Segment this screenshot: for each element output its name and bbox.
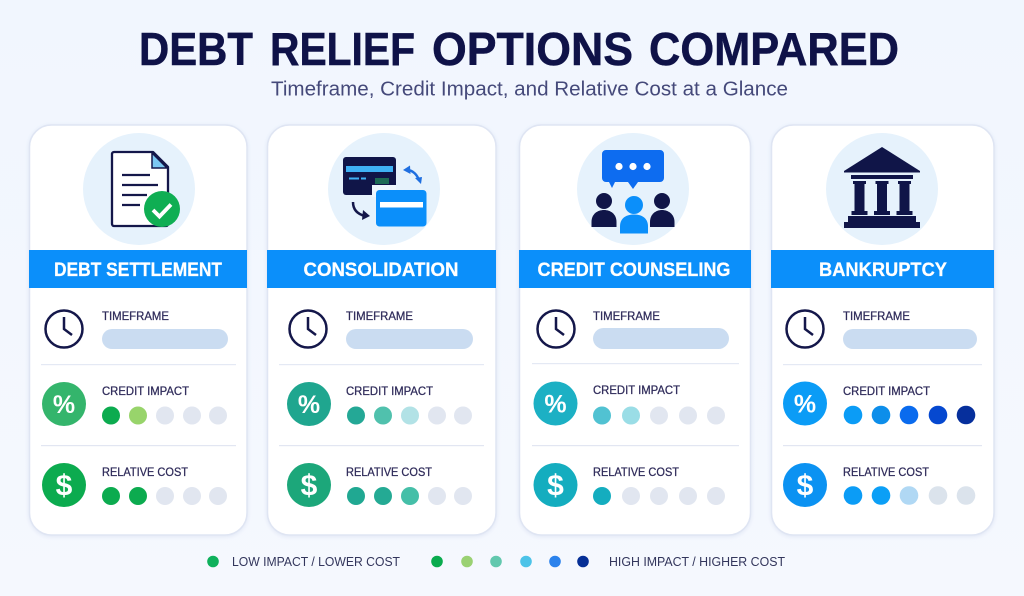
credit impact row: CREDIT IMPACT [843, 386, 930, 398]
heading band [771, 250, 994, 288]
title: COMPARED [649, 23, 899, 75]
credit impact row: % [794, 390, 816, 418]
title: RELIEF [270, 23, 415, 75]
heading band [29, 250, 247, 288]
relative cost row: $ [301, 470, 318, 502]
heading band: CONSOLIDATION [304, 260, 458, 281]
relative cost row: RELATIVE COST [593, 467, 679, 479]
title: DEBT [139, 23, 253, 75]
relative cost row: RELATIVE COST [843, 467, 929, 479]
relative cost row: RELATIVE COST [346, 467, 432, 479]
timeframe row [290, 310, 473, 349]
icon: credit cards with arrows [328, 133, 440, 245]
heading band: DEBT SETTLEMENT [54, 260, 222, 281]
title [139, 23, 899, 75]
legend [207, 555, 785, 569]
credit impact row [287, 382, 472, 426]
relative cost row: $ [797, 470, 814, 502]
legend: LOW IMPACT / LOWER COST [232, 555, 400, 569]
legend: HIGH IMPACT / HIGHER COST [609, 555, 785, 569]
panel: credit counseling [519, 125, 751, 535]
timeframe row: TIMEFRAME [843, 311, 910, 323]
credit impact row [42, 382, 227, 426]
timeframe row: TIMEFRAME [102, 311, 169, 323]
credit impact row: CREDIT IMPACT [593, 385, 680, 397]
timeframe row [538, 310, 729, 349]
credit impact row: % [53, 391, 75, 419]
timeframe row: TIMEFRAME [346, 311, 413, 323]
relative cost row [287, 463, 472, 507]
icon: people with speech bubble [577, 133, 689, 245]
credit impact row: CREDIT IMPACT [102, 386, 189, 398]
panel: bankruptcy [771, 125, 994, 535]
relative cost row: $ [547, 470, 564, 502]
relative cost row [534, 463, 725, 507]
relative cost row: $ [56, 470, 73, 502]
heading band [267, 250, 496, 288]
icon: courthouse [826, 133, 938, 245]
panel: debt settlement [29, 125, 247, 535]
heading band: BANKRUPTCY [819, 260, 947, 281]
credit impact row [783, 382, 975, 426]
credit impact row [534, 382, 725, 426]
timeframe row: TIMEFRAME [593, 311, 660, 323]
credit impact row: % [544, 390, 567, 418]
relative cost row: RELATIVE COST [102, 467, 188, 479]
relative cost row [783, 463, 975, 507]
icon: document with check [83, 133, 195, 245]
heading band: CREDIT COUNSELING [538, 260, 730, 281]
relative cost row [42, 463, 227, 507]
heading band [519, 250, 751, 288]
credit impact row: CREDIT IMPACT [346, 386, 433, 398]
subtitle: Timeframe, Credit Impact, and Relative Cost at a Glance [271, 78, 788, 100]
panel: consolidation [267, 125, 496, 535]
credit impact row: % [298, 391, 320, 419]
timeframe row [786, 310, 977, 349]
timeframe row [46, 310, 228, 349]
title: OPTIONS [432, 23, 633, 75]
